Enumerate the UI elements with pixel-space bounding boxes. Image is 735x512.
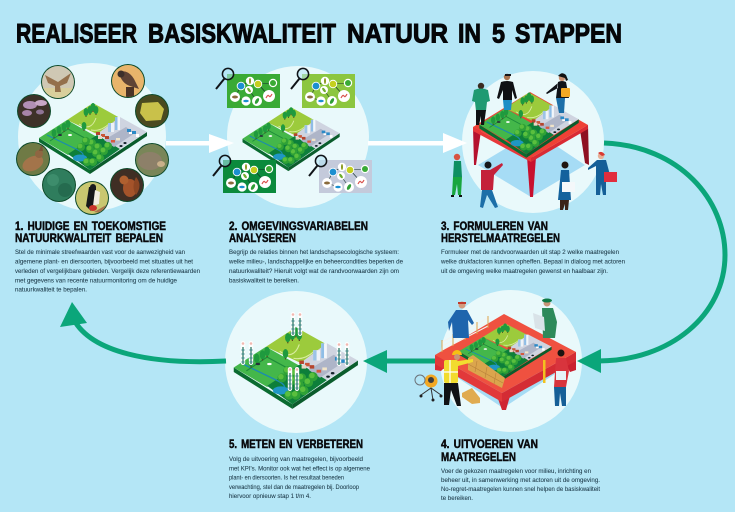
stack of bricks xyxy=(462,388,480,404)
title: NATUUR xyxy=(347,18,448,48)
step 2 heading: ANALYSEREN xyxy=(229,233,296,245)
step 5 body text: hiervoor opnieuw stap 1 t/m 4. xyxy=(229,493,311,500)
photo: flowers xyxy=(17,94,51,128)
person: red sweater pointing xyxy=(480,162,503,208)
photo: hare xyxy=(16,142,50,176)
person: black sweater xyxy=(497,74,517,110)
photo: squirrel xyxy=(110,168,144,202)
step 2 body text: basiskwaliteit te bereiken. xyxy=(229,278,299,284)
step 1 body text: Stel de minimale streefwaarden vast voor de aanwezigheid van xyxy=(15,249,185,256)
panel: step 4 xyxy=(415,290,600,502)
step 4 background circle xyxy=(440,290,582,432)
step 4 landscape xyxy=(459,323,552,380)
step 2 body text: natuurkwaliteit? Hieruit volgt wat de randvoorwaarden zijn om xyxy=(229,268,399,275)
step 2 landscape xyxy=(242,107,340,171)
step 2 background circle xyxy=(227,66,369,208)
step 5 background circle xyxy=(225,291,367,433)
step 1 heading xyxy=(15,221,166,245)
step 4 body text: beheer uit, in samenwerking met actoren uit de omgeving. xyxy=(441,477,600,484)
step 2 heading xyxy=(229,221,368,245)
step 3 heading xyxy=(441,221,560,245)
cement mixer xyxy=(415,374,442,402)
measuring sensors xyxy=(241,312,349,391)
species photos ring xyxy=(16,64,169,215)
network card: green xyxy=(216,68,280,108)
arrow: step 1 to step 2 xyxy=(166,134,234,153)
step 1 heading: NATUURKWALITEIT BEPALEN xyxy=(15,233,163,245)
yellow ruler xyxy=(543,360,546,383)
step 5 heading: 5. METEN EN VERBETEREN xyxy=(229,439,363,451)
photo: moss xyxy=(42,168,76,202)
person: blue suit with red bag xyxy=(588,152,617,195)
step 1 body text xyxy=(15,249,200,294)
arrow: step 5 to step 1 xyxy=(60,302,226,362)
step 3 landscape xyxy=(479,93,579,158)
step 4 heading: 4. UITVOEREN VAN xyxy=(441,439,538,451)
step 5 landscape xyxy=(234,327,358,409)
step 4 body text xyxy=(441,468,600,502)
step 1 body text: verleden of vergelijkbare gebieden. Vergelijk deze referentiewaarden xyxy=(15,268,200,275)
step 1 body text: algemene plant- en diersoorten, bijvoorbeeld met situaties uit het xyxy=(15,258,193,266)
step 3 heading: 3. FORMULEREN VAN xyxy=(441,221,548,233)
photo: hedgehog xyxy=(135,143,169,177)
person: green hoodie xyxy=(472,83,490,125)
photo: sparrow xyxy=(111,64,145,98)
person: green ranger with clipboard xyxy=(533,298,557,338)
fence xyxy=(442,316,488,352)
step 2 body text xyxy=(228,249,403,284)
step 4 heading xyxy=(441,439,538,464)
person: man in blue xyxy=(448,302,474,338)
title xyxy=(16,18,622,48)
photo: woodpecker xyxy=(75,181,109,215)
title: BASISKWALITEIT xyxy=(148,18,336,48)
step 1 background circle xyxy=(18,63,166,211)
step 1 landscape xyxy=(39,103,147,174)
panel: step 3 xyxy=(440,71,625,275)
brick wall xyxy=(468,355,505,388)
step 4 body text: No-regret-maatregelen kunnen snel helpen de basiskwaliteit xyxy=(441,486,600,493)
network card: grey xyxy=(309,155,372,193)
step 1 body text: natuurkwaliteit te bepalen. xyxy=(15,286,87,294)
person: woman in red xyxy=(554,350,569,406)
step 3 body text: uit de omgeving welke maatregelen gewenst en haalbaar zijn. xyxy=(441,268,608,275)
step 1 heading: 1. HUIDIGE EN TOEKOMSTIGE xyxy=(15,221,166,233)
step 5 body text: verwachting, stel dan de maatregelen bij. Doorloop xyxy=(229,484,359,491)
network card: lime xyxy=(291,68,355,108)
red table xyxy=(435,314,576,410)
panel: step 2 xyxy=(213,66,403,284)
photo: flying bird xyxy=(41,65,75,99)
step 5 body text: met KPI's. Monitor ook wat het effect is op algemene xyxy=(229,466,370,472)
step 3 heading: HERSTELMAATREGELEN xyxy=(441,233,560,245)
step 3 body text xyxy=(440,249,625,275)
step 4 heading: MAATREGELEN xyxy=(441,452,516,464)
title: IN xyxy=(458,18,481,48)
step 2 body text: Begrijp de relaties binnen het landschapsecologische systeem: xyxy=(229,249,399,256)
panel: step 5 xyxy=(225,291,370,500)
panel: step 1 xyxy=(15,63,200,294)
title: REALISEER xyxy=(16,18,137,48)
person: construction worker xyxy=(444,350,473,406)
step 4 body text: Voer de gekozen maatregelen voor milieu, inrichting en xyxy=(441,468,591,475)
step 2 heading: 2. OMGEVINGSVARIABELEN xyxy=(229,221,368,233)
step 5 body text: plant- en diersoorten. Is het resultaat beneden xyxy=(229,474,344,482)
step 1 body text: met gegevens van recente natuurmonitoring om de huidige xyxy=(15,278,177,284)
step 5 body text: Volg de uitvoering van maatregelen, bijvoorbeeld xyxy=(229,456,363,463)
title: STAPPEN xyxy=(515,18,622,48)
arrow: step 2 to step 3 xyxy=(368,133,467,153)
step 2 body text: welke milieu-, landschappelijke en beheercondities beperken de xyxy=(228,258,403,266)
arrow: step 3 to step 4 xyxy=(577,143,725,373)
step 5 body text xyxy=(229,456,370,500)
table with floor shadow xyxy=(473,92,589,197)
person: woman in green xyxy=(451,154,462,197)
arrow: step 4 to step 5 xyxy=(363,350,435,373)
title: 5 xyxy=(492,18,505,48)
step 3 body text: Formuleer met de randvoorwaarden uit stap 2 welke maatregelen xyxy=(441,249,619,256)
photo: yellow lichen xyxy=(135,94,169,128)
step 4 body text: te bereiken. xyxy=(441,495,473,502)
step 3 body text: welke drukfactoren kunnen opheffen. Bepaal in dialoog met actoren xyxy=(440,258,625,266)
network card: dark green xyxy=(213,155,276,193)
person: woman with yellow folder xyxy=(546,73,570,113)
person: woman in blue dress xyxy=(558,162,575,210)
step 3 background circle xyxy=(462,71,604,213)
